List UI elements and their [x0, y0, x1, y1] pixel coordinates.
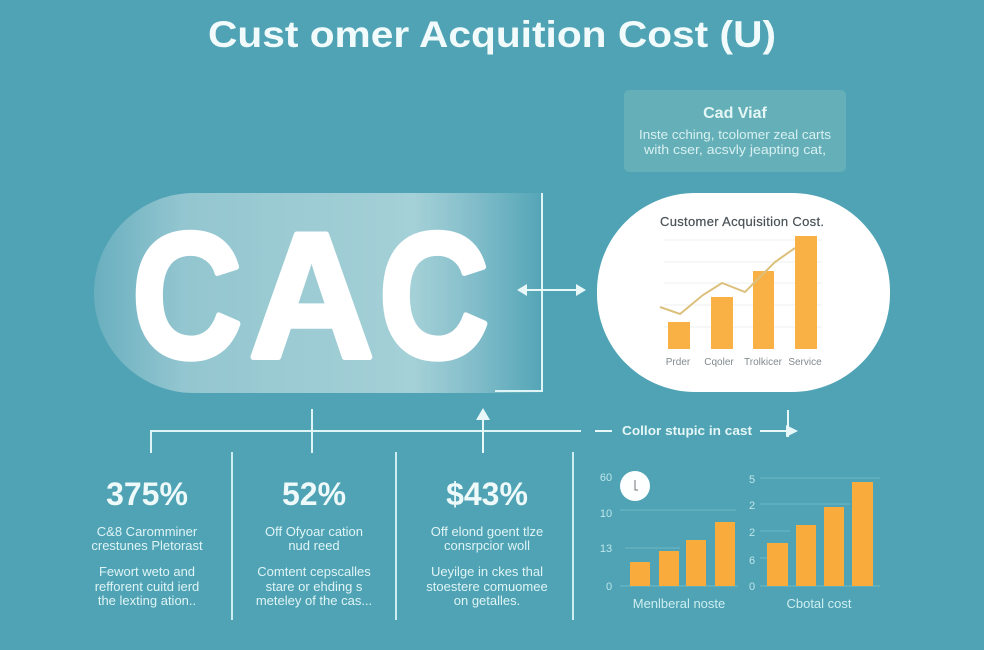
chart: membership — [600, 471, 738, 611]
callout: card: with cser, acsvly jeapting cat, — [643, 142, 826, 157]
chart: total cost: 6 — [749, 555, 755, 567]
trend line — [660, 248, 795, 314]
connector: pill bracket — [495, 193, 542, 391]
panel: stat 375%: the lexting ation.. — [98, 593, 196, 608]
panel: stat 52%: meteley of the cas... — [256, 593, 372, 608]
chart title: Customer Acquisition Cost. — [660, 214, 824, 229]
panel: chart pill — [597, 193, 890, 392]
panel: stat $43%: on getalles. — [454, 593, 520, 608]
chart: membership: 10 — [600, 508, 612, 520]
chart: membership: 60 — [600, 472, 612, 484]
CAC lettering: C — [379, 196, 489, 395]
chart: total cost: 2 — [749, 527, 755, 539]
legend: cost — [595, 410, 798, 438]
callout: card: Inste cching, tcolomer zeal carts — [639, 127, 832, 142]
icon: clock — [620, 471, 650, 501]
panel: stat 52%: Comtent cepscalles — [257, 564, 371, 579]
CAC lettering: A — [249, 196, 374, 395]
panel: stat 375%: crestunes Pletorast — [91, 538, 203, 553]
panel: stat 52%: 52% — [282, 476, 346, 512]
callout: card — [624, 90, 846, 172]
chart: membership: Menlberal noste — [633, 596, 725, 611]
chart: membership: 13 — [600, 543, 612, 555]
bars — [668, 236, 817, 349]
axis labels: Trolkicer — [744, 357, 783, 368]
title: Cust omer Acquition Cost (U) — [208, 14, 776, 55]
panel: stat $43%: consrpcior woll — [444, 538, 530, 553]
panel: stat $43%: Ueyilge in ckes thal — [431, 564, 543, 579]
panel: stat $43%: stoestere comuomee — [426, 579, 548, 594]
grid lines — [664, 240, 822, 327]
panel: stat 375% — [91, 476, 203, 608]
panel: CAC pill — [94, 193, 540, 395]
panel: stat $43%: $43% — [446, 476, 528, 512]
panel: stat $43% — [426, 476, 548, 608]
CAC lettering: C — [132, 196, 242, 395]
connector: lower rail — [151, 409, 581, 453]
panel: stat 52% — [256, 476, 372, 608]
dividers — [232, 452, 573, 620]
panel: stat 375%: Fewort weto and — [99, 564, 195, 579]
panel: stat 375%: 375% — [106, 476, 188, 512]
chart: total cost — [749, 474, 880, 611]
panel: stat 52%: Off Ofyoar cation — [265, 524, 363, 539]
panel: stat 375%: C&8 Caromminer — [97, 524, 198, 539]
panel: stat 52%: nud reed — [288, 538, 340, 553]
axis labels: Service — [788, 357, 822, 368]
panel: stat 52%: stare or ehding s — [266, 579, 363, 594]
axis labels — [666, 357, 822, 368]
CAC lettering — [132, 196, 489, 395]
legend: cost: Collor stupic in cast — [622, 423, 753, 438]
chart: membership: 0 — [606, 581, 612, 593]
callout: card: Cad Viaf — [703, 105, 768, 122]
chart: total cost: 0 — [749, 581, 755, 593]
chart: total cost: 2 — [749, 500, 755, 512]
arrow: up — [476, 408, 490, 453]
chart: total cost: Cbotal cost — [786, 596, 852, 611]
axis labels: Prder — [666, 357, 691, 368]
arrow: double-headed — [517, 284, 586, 296]
panel: stat 375%: refforent cuitd ierd — [95, 579, 199, 594]
axis labels: Cqoler — [704, 357, 734, 368]
panel: stat $43%: Off elond goent tlze — [431, 524, 543, 539]
chart: total cost: 5 — [749, 474, 755, 486]
